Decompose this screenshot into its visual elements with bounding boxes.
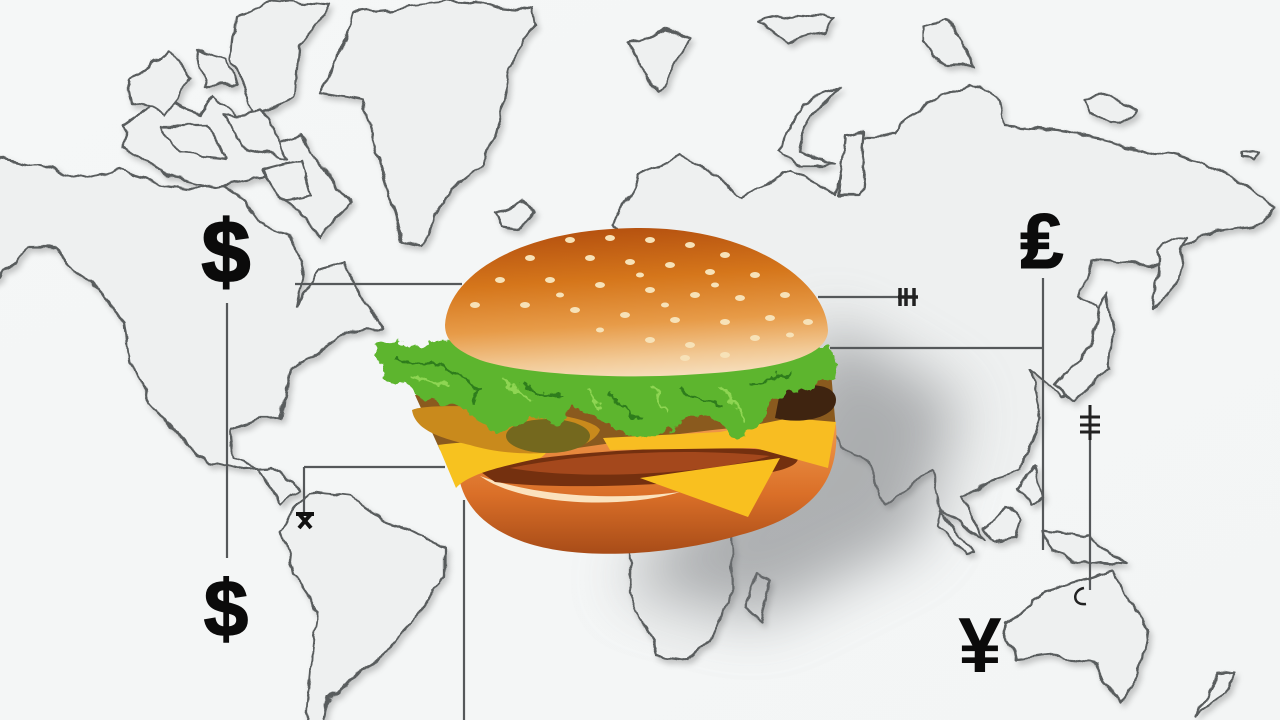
map: Eurasia [615,85,1275,540]
burger [373,228,836,554]
map: Novaya Zemlya [780,85,842,165]
map: Svalbard [630,30,690,93]
map: Arctic islands [756,14,833,40]
small glyph: South America mark [296,514,314,528]
connector lines [227,278,1090,720]
small glyph: right vertical tick mark [1080,405,1100,440]
map: Southeast Asia islands [985,508,1020,542]
currency: dollar bottom: $ [204,564,248,653]
bottom bun [458,422,836,554]
pickle and dark patty [412,406,600,453]
map: Greenland [322,2,538,245]
currency: dollar top: $ [202,202,250,301]
small glyph: right tick mark [898,288,918,306]
map: Kamchatka [1155,235,1185,310]
map: Madagascar [745,572,770,622]
patty [478,448,798,486]
map: Canadian islands [122,95,350,235]
map: New Zealand [1195,670,1237,715]
burger shadow [620,320,960,620]
cheese [438,441,547,488]
lettuce [373,340,836,440]
map: South America [282,492,445,720]
map: Japan [1055,290,1112,400]
map: Australia [1003,570,1147,700]
top bun [445,228,828,376]
currency: yen: ¥ [958,601,1002,689]
map: Scandinavia detail [838,130,865,195]
map: Africa [630,535,732,660]
map: North America [0,155,383,503]
currency: pound: ₤ [1020,197,1064,285]
sesame seeds [470,235,813,361]
burger filling base [415,360,836,490]
small glyph: Australia hook [1075,588,1086,604]
map: Iceland [495,203,534,230]
